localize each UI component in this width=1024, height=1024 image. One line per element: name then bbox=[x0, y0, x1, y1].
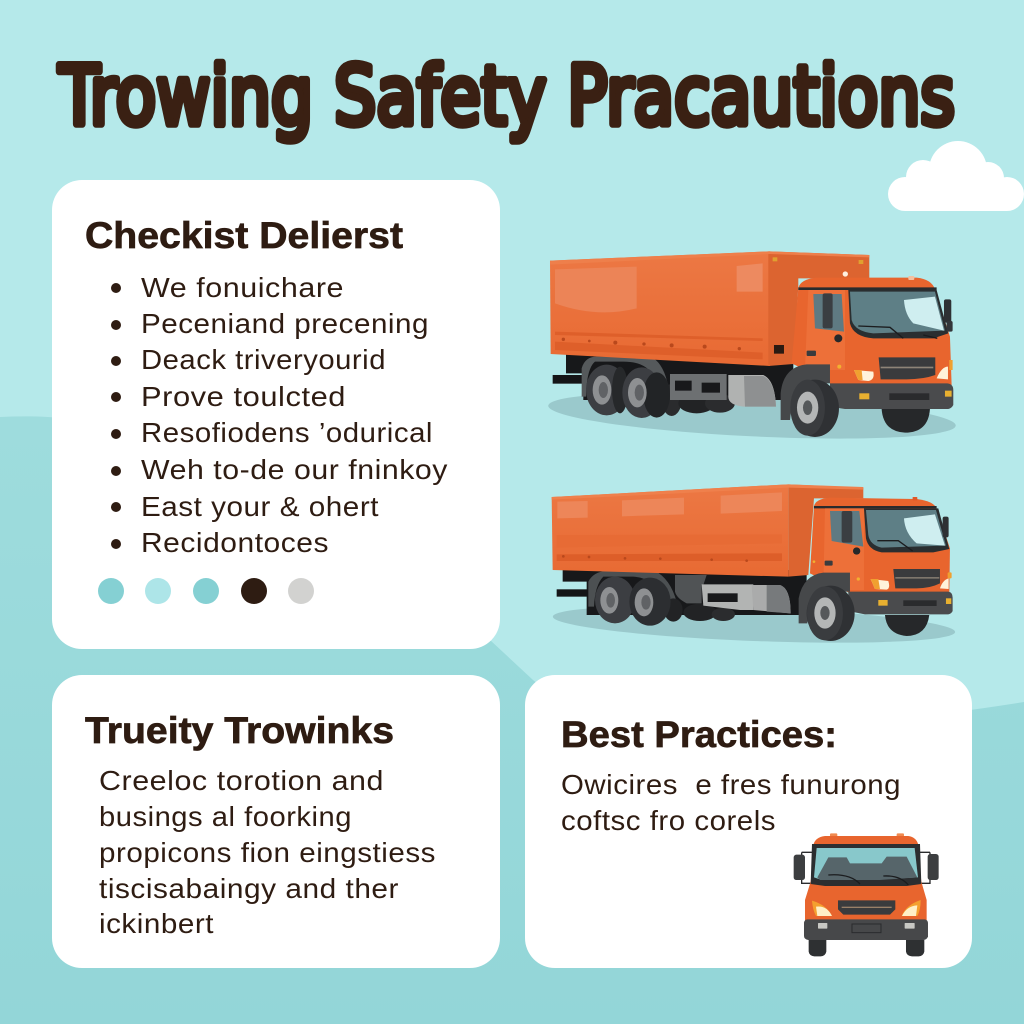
colour dots bbox=[98, 578, 314, 604]
bullet list: Recidontoces bbox=[141, 527, 329, 558]
truck: top bbox=[547, 251, 957, 446]
heading: best practices: Best Practices: bbox=[561, 714, 837, 755]
paragraph bbox=[99, 765, 436, 939]
cab bbox=[792, 278, 952, 385]
bullet list: Weh to-de our fninkoy bbox=[141, 454, 448, 485]
truck: middle bbox=[552, 484, 956, 649]
bullet list: Deack triveryourid bbox=[141, 344, 386, 375]
bullet list: East your & ohert bbox=[141, 491, 379, 522]
bumper bbox=[830, 383, 953, 409]
paragraph: propicons fion eingstiess bbox=[99, 837, 436, 868]
paragraph: Owicires e fres funurong bbox=[561, 769, 901, 800]
bullet list: Prove toulcted bbox=[141, 381, 346, 412]
bullet list: Resofiodens ’odurical bbox=[141, 417, 433, 448]
icon: truck front bbox=[794, 833, 939, 956]
chassis bbox=[566, 353, 793, 400]
cargo box bbox=[550, 251, 770, 366]
cargo box bbox=[552, 484, 788, 577]
chassis bbox=[563, 570, 807, 615]
paragraph: Creeloc torotion and bbox=[99, 765, 384, 796]
icon: cloud bbox=[888, 141, 1024, 211]
panel: checklist bbox=[52, 180, 500, 649]
bumper bbox=[848, 592, 953, 614]
bullet list: Peceniand precening bbox=[141, 308, 429, 339]
heading: trueity trowinks: Trueity Trowinks bbox=[85, 710, 394, 751]
bullet list: We fonuichare bbox=[141, 272, 344, 303]
paragraph: coftsc fro corels bbox=[561, 805, 776, 836]
heading: checklist: Checkist Delierst bbox=[85, 215, 403, 256]
paragraph: busings al foorking bbox=[99, 801, 352, 832]
cab bbox=[810, 498, 950, 593]
paragraph: ickinbert bbox=[99, 908, 214, 939]
panel: best practices bbox=[525, 675, 972, 968]
bullet list bbox=[111, 272, 448, 558]
panel: trueity trowinks bbox=[52, 675, 500, 968]
paragraph bbox=[561, 769, 901, 836]
paragraph: tiscisabaingy and ther bbox=[99, 873, 399, 904]
